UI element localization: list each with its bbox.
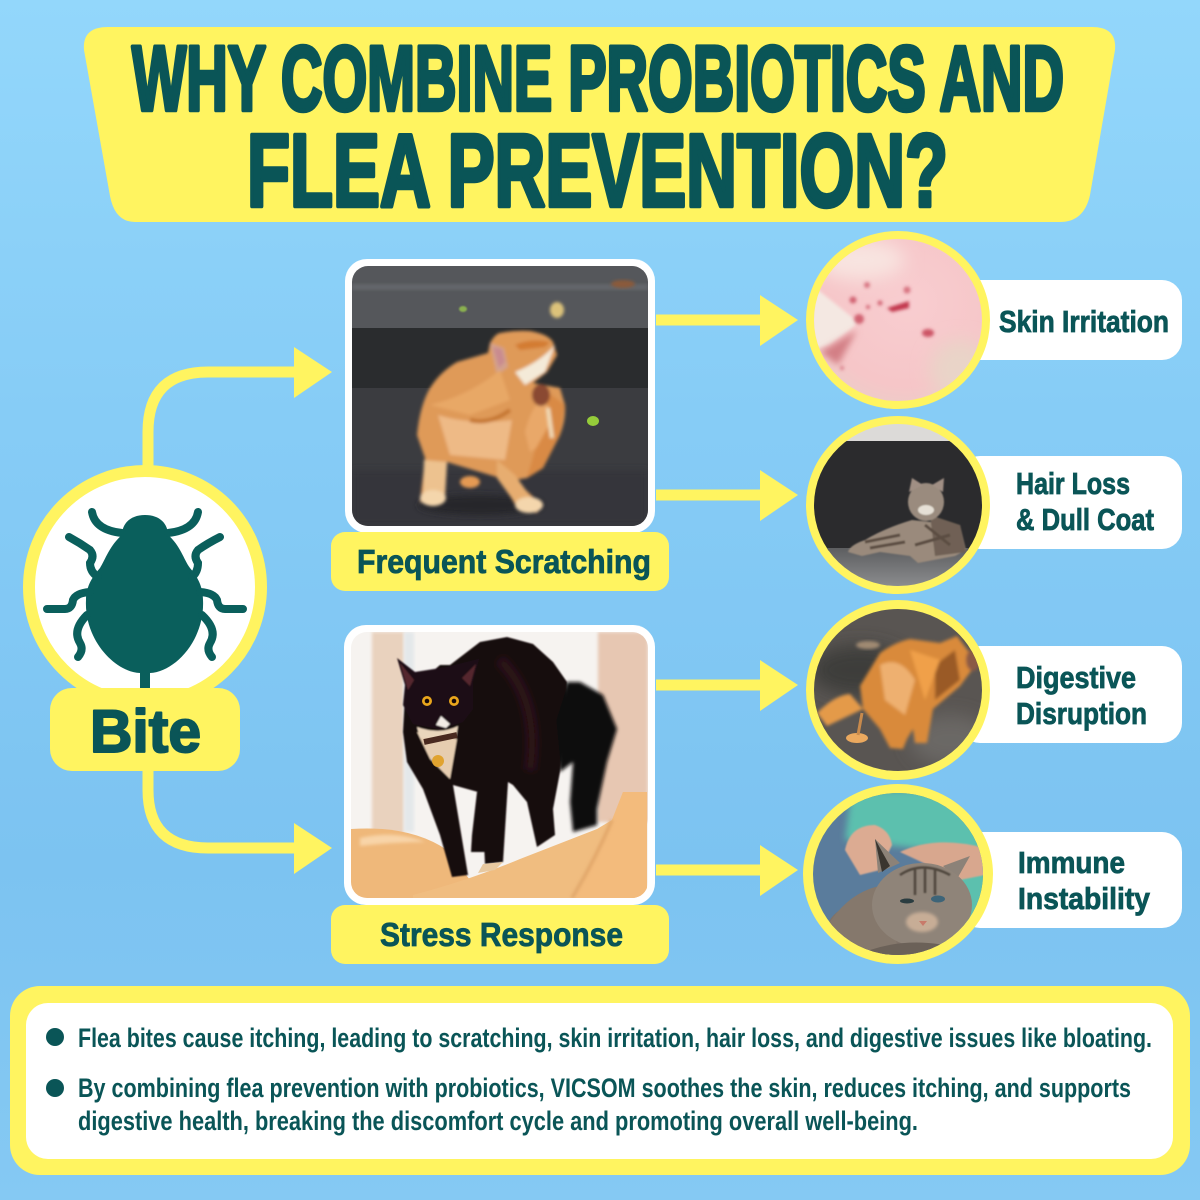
outcome pill: digestive disruption: Disruption bbox=[1016, 696, 1147, 731]
bite circle with flea icon bbox=[29, 471, 261, 703]
arrow: stress to digestive disruption bbox=[656, 660, 798, 711]
summary panel bbox=[10, 986, 1190, 1175]
arrow: bite to frequent scratching bbox=[148, 347, 332, 466]
photo circle: hair loss bbox=[806, 416, 990, 594]
title banner bbox=[84, 27, 1115, 228]
bite label: Bite bbox=[90, 698, 201, 765]
label: frequent scratching: Frequent Scratching bbox=[357, 543, 651, 580]
outcome pill: digestive disruption: Digestive bbox=[1016, 660, 1136, 695]
arrow: scratching to hair loss bbox=[656, 470, 798, 521]
outcome pill: hair loss and dull coat: & Dull Coat bbox=[1016, 502, 1154, 537]
label: frequent scratching bbox=[331, 532, 669, 591]
bullet two bbox=[46, 1073, 1131, 1136]
arrow: scratching to skin irritation bbox=[656, 295, 798, 346]
photo: arched black cat bbox=[344, 625, 655, 905]
label: stress response bbox=[331, 905, 669, 964]
arrow: stress to immune instability bbox=[656, 845, 798, 896]
outcome pill: skin irritation bbox=[960, 280, 1182, 360]
bite label bbox=[50, 688, 240, 771]
bullet two: digestive health, breaking the discomfort cycle and promoting overall well-being. bbox=[78, 1106, 918, 1136]
outcome pill: hair loss and dull coat bbox=[960, 456, 1182, 549]
outcome pill: immune instability bbox=[960, 832, 1182, 928]
photo circle: skin irritation bbox=[806, 231, 990, 409]
label: stress response: Stress Response bbox=[380, 916, 623, 953]
icon: flea bbox=[47, 512, 243, 688]
outcome pill: digestive disruption bbox=[960, 646, 1182, 743]
photo: orange cat scratching bbox=[345, 259, 655, 533]
outcome pill: skin irritation: Skin Irritation bbox=[999, 304, 1169, 339]
outcome pill: immune instability: Immune bbox=[1018, 845, 1125, 880]
outcome pill: hair loss and dull coat: Hair Loss bbox=[1016, 466, 1130, 501]
photo circle: digestive disruption bbox=[806, 600, 990, 780]
photo circle: immune instability bbox=[803, 784, 993, 965]
arrow: bite to stress response bbox=[148, 768, 332, 874]
outcome pill: immune instability: Instability bbox=[1018, 881, 1151, 916]
